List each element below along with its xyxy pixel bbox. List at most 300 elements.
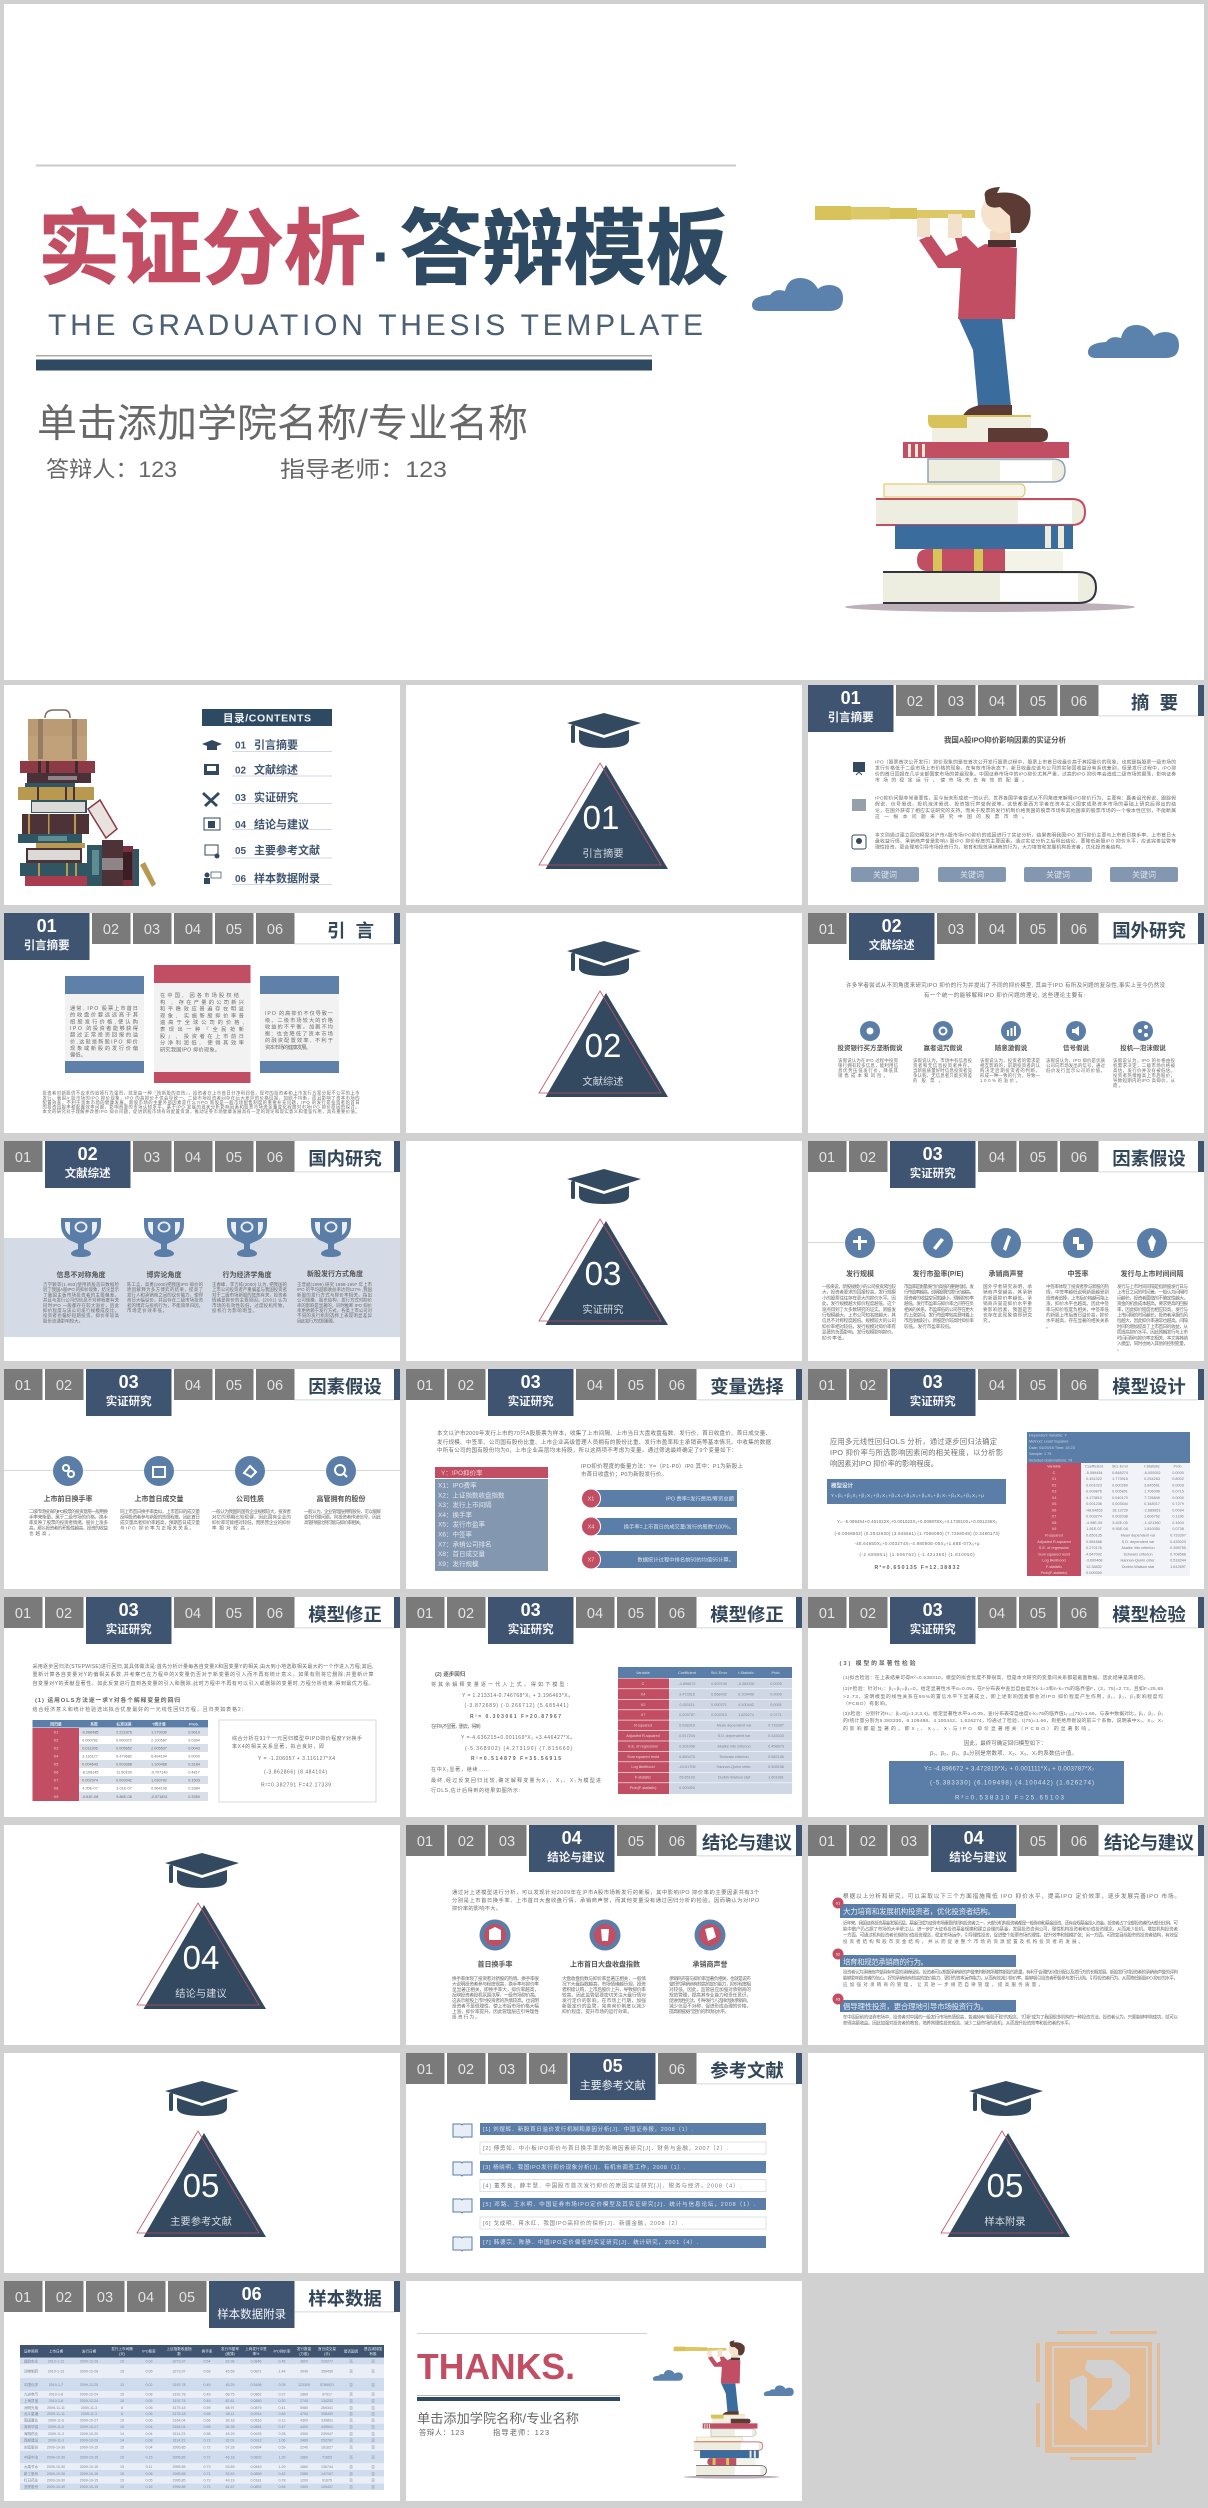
- section tabs: 06: [1071, 1378, 1087, 1394]
- sample data table: 1860: [300, 2465, 308, 2469]
- research angles: 王春峰、李吉栋(2000) 认为, 把我国的: [212, 1281, 288, 1288]
- regression table: Sum squared resid: [1038, 1552, 1070, 1556]
- regression table: 0.1503: [188, 1778, 200, 1782]
- slide heading: 模型修正: [308, 1604, 382, 1625]
- sample data table: 10: [120, 2425, 124, 2429]
- section tabs: 06: [1071, 1150, 1087, 1166]
- key factors: 者积极认购，上市后股价上升，导致抑价率: [562, 1986, 646, 1993]
- section tabs: 实证研究: [910, 1622, 956, 1636]
- slide heading: 模型检验: [1112, 1604, 1186, 1625]
- rule: [417, 2395, 620, 2401]
- sample data table: 32.01: [226, 2438, 234, 2442]
- card: right: 衡; 也会降低了资本市场: [265, 1029, 333, 1037]
- section tabs: 06: [1071, 1834, 1087, 1850]
- regression table: 1.773915: [1112, 1477, 1128, 1481]
- method paragraph: 重新计算各自变量对Y的偏相关系数,并考察已在方程中的X变量仍否对于新变量的引入而不再有统计意义。如果有则将它删除;并重新计算: [32, 1671, 374, 1678]
- factor texts: 投资者追捧，上市后价格越可能上: [1046, 1294, 1109, 1301]
- regression table: -0.066485: [81, 1730, 99, 1734]
- factor texts: 相关的关系，市盈率低的公司存在更大: [904, 1306, 974, 1313]
- factor texts: 观点得到了大多数研究的证实。新股发: [822, 1306, 896, 1313]
- factor texts: 资金的机会成本越高，要求更高的回报: [1117, 1300, 1188, 1307]
- sample data table: 东睦股份: [24, 2444, 39, 2449]
- stepwise regression steps: [431, 1670, 601, 1794]
- recommendation text: 获得高额收益。因此加强对投资者的教育，培养其理性投资观念，减少二级市场的投机，从而提升投资效率和投资者的水平。: [843, 2020, 1073, 2026]
- title: 答辩模板: [400, 204, 728, 295]
- factor texts: 较低。发行市盈率较低。: [904, 1323, 954, 1330]
- card: left: 招股发行价格,使认购: [70, 1017, 138, 1025]
- factor texts: 入模型，同时也纳入其他的控制变量，: [1117, 1340, 1188, 1347]
- regression table: 0.003274: [1086, 1515, 1102, 1519]
- regression table: 0.0394: [188, 1738, 200, 1742]
- result box: Y = -1.206057 + 3.116127*X4: [258, 1756, 335, 1762]
- subheading note: 结合经济意义和统计检验选出拟合优度最好的一元线性回归方程，且归类如表格2：: [32, 1706, 246, 1713]
- intro: 通过对上述模型进行分析，可以发现针对2009年在沪市A股市场新发行的新股，其中影响IPO 抑价率的主要因素共有3个: [452, 1888, 760, 1896]
- section tabs: 02: [860, 1834, 876, 1850]
- sample data table: (万股): [299, 2352, 309, 2356]
- section tabs: 01: [819, 922, 835, 938]
- sample data table: 率%: [253, 2351, 260, 2356]
- research angles: 了我国主板市场投资者的主要偏差。: [43, 1291, 119, 1298]
- sample data table: 15: [120, 2478, 124, 2482]
- sample data table: 2009-12-25: [80, 2383, 98, 2387]
- regression table: 11.50199: [116, 1770, 132, 1774]
- regression table: X9: [54, 1795, 58, 1799]
- regression table: Sum squared resid: [627, 1755, 659, 1759]
- sample data table: 0.0823: [250, 2456, 262, 2460]
- sample data table: 中国化学: [24, 2382, 39, 2387]
- regression table: Adjusted R-squared: [1037, 1540, 1071, 1544]
- sample data table: 0.0880: [250, 2399, 262, 2403]
- section tabs: 实证研究: [106, 1622, 152, 1636]
- regression table: X9: [1052, 1527, 1056, 1531]
- section tabs: 01: [417, 2062, 433, 2078]
- research angles: 情绪是抑价的主要原因。(2001) 认为: [212, 1297, 287, 1304]
- regression table: 0.964106: [151, 1786, 167, 1790]
- regression table: 3.845561: [1144, 1483, 1160, 1487]
- factor texts: [822, 1269, 1188, 1352]
- regression table: Prob.: [189, 1722, 199, 1726]
- recommendation bars: [832, 1898, 1016, 2012]
- factor texts: 销商声誉越高，其承销: [983, 1289, 1032, 1296]
- sample data table: 3273.97: [172, 2360, 186, 2364]
- sample data table: 15: [120, 2360, 124, 2364]
- section tabs: 06: [1071, 1606, 1087, 1622]
- sample data table: 0.02: [146, 2383, 152, 2387]
- measure note: 市首日收盘价；P0为新股发行价。: [581, 1470, 667, 1478]
- sample data table: 发行市盈率: [221, 2346, 239, 2351]
- sample data table: 2009-10-30: [47, 2472, 65, 2476]
- sample data table: 0.66: [204, 2418, 210, 2422]
- section tabs: 04: [185, 922, 201, 938]
- contents icons: [202, 740, 222, 884]
- sample data table: (摊薄): [225, 2351, 235, 2356]
- panel: model revision 2: [406, 1597, 802, 1817]
- method description: 应用多元线性回归OLS 分析，通过逐步回归法确定: [830, 1437, 997, 1446]
- regression table: 0.001023: [1086, 1483, 1102, 1487]
- key factors: 换手率体现了投资者对新股的热情。换手率很: [452, 1975, 539, 1982]
- sample data table: 0.54: [204, 2360, 210, 2364]
- section tabs: 06: [267, 1378, 283, 1394]
- panel: references: [406, 2053, 802, 2273]
- sample data table: 147197: [321, 2472, 333, 2476]
- section tabs: 04: [989, 1150, 1005, 1166]
- sample data table: 2009-11-3: [48, 2432, 64, 2436]
- sample data table: 否: [349, 2412, 353, 2416]
- sample data table: 8: [121, 2412, 123, 2416]
- regression table: 1.810050: [1144, 1527, 1160, 1531]
- section tabs: 05: [1030, 922, 1046, 938]
- section tabs: 06: [242, 2284, 262, 2304]
- regression table: -8.108145: [81, 1770, 99, 1774]
- sample data table: 2010-1-8: [49, 2399, 63, 2403]
- sample data table: 4300: [300, 2418, 308, 2422]
- sample data table: 0.0912: [250, 2438, 262, 2442]
- key factors: 减少信息不对称，促进形成合理的价格，: [669, 2002, 751, 2010]
- regression table: Hannan-Quinn criter.: [716, 1765, 752, 1769]
- sample data table: 15: [120, 2465, 124, 2469]
- section tabs: 04: [989, 694, 1005, 710]
- sample data table: 1.25: [278, 2456, 286, 2460]
- method paragraph: 自变量对Y的贡献显著性。如此反复进行直到各变量的引入和删除,此时方程中不再有可以引入或删除的变量时,方程分析结束,得到最优方程。: [32, 1680, 374, 1687]
- sample data table: 339801: [321, 2418, 333, 2422]
- slide heading: 模型设计: [1112, 1376, 1186, 1397]
- final model box: R²=0.538310 F=25.65103: [955, 1794, 1065, 1802]
- slide heading: 因素假设: [308, 1376, 382, 1397]
- regression table: 18.13729: [1112, 1508, 1128, 1512]
- regression table: X3: [1052, 1490, 1056, 1494]
- regression table: 1.601981: [768, 1776, 784, 1780]
- section tabs: 04: [185, 1606, 201, 1622]
- regression table: X8: [1052, 1521, 1056, 1525]
- regression table: 0.0001: [770, 1703, 782, 1707]
- result box: [219, 1720, 376, 1802]
- factor texts: 小的股票往往存在更大的抑价水平。因: [822, 1294, 896, 1301]
- section tabs: 02: [78, 1144, 98, 1164]
- stepwise regression steps: R²= 0.303061 F=20.87967: [470, 1714, 561, 1720]
- regression table: 1.612697: [1170, 1565, 1186, 1569]
- panel: title slide: [4, 4, 1204, 680]
- regression equation: R²=0.650135 F=12.38832: [874, 1565, 960, 1571]
- section tabs: 01: [15, 1606, 31, 1622]
- recommendation text: 在中国目前的证券市场中，投资者对中国的一级发行市场热情很高，普遍持有"新股不败"的观念，"打新"成为了我国很多机构的一种投资方法。投资者认为，只要能够申购成功，就可以: [843, 2014, 1178, 2020]
- key factors: 誉好的承销商有较高的定价能力，抑价程度相: [669, 1980, 751, 1988]
- regression table: 0.003368: [116, 1762, 132, 1766]
- sample data table: 0.06: [146, 2418, 152, 2422]
- factor texts: 的上涨空间。发行市盈率较高意味着上: [904, 1312, 974, 1318]
- factor texts: 间越长，投资者面临的不确定性越大，: [1117, 1294, 1188, 1301]
- regression table: X7: [1052, 1515, 1056, 1519]
- sample data table: 3114.23: [173, 2432, 185, 2436]
- regression table: 0.733397: [1170, 1534, 1186, 1538]
- key factors: 规范管理，提高其专业能力和责任意识，: [669, 1992, 751, 1998]
- regression table: Std. Error: [711, 1671, 728, 1675]
- factor texts: 。: [1117, 1347, 1122, 1352]
- regression table: 2.221876: [116, 1730, 132, 1734]
- regression table: 0.000269: [1112, 1483, 1128, 1487]
- regression table: Adjusted R-squared: [626, 1734, 660, 1738]
- keyword buttons: 关键词: [1046, 870, 1070, 880]
- factor texts: 投资者的收益空间就越小，预期抑价率: [904, 1294, 974, 1301]
- sample data table: 2010-1-8: [49, 2393, 63, 2397]
- sample data table: 61.67: [226, 2485, 234, 2489]
- sample data table: 2009-12-28: [80, 2370, 98, 2374]
- sample data table: 15: [120, 2472, 124, 2476]
- contents list: 文献综述: [254, 762, 298, 776]
- recommendation text: 能够影响投资者的信心。好的承销商有较高的定价能力、更好的资本运作能力，从而有效减少抑价率，能够吸引投资者积极参与发行认购。引导投资者行为，从而降低新股IPO 抑价的水平，: [843, 1974, 1178, 1982]
- sample data table: 2009-10-15: [80, 2456, 98, 2460]
- regression table: X4: [1052, 1496, 1056, 1500]
- regression table: 0.8002: [1172, 1477, 1184, 1481]
- sample data table: 2995.85: [172, 2456, 186, 2460]
- sample data table: 0.04: [146, 2432, 152, 2436]
- heading: contents: 目录/CONTENTS: [223, 711, 311, 724]
- sample data table: 0.47: [278, 2425, 286, 2429]
- regression table: 2.005537: [151, 1746, 167, 1750]
- section tabs: 06: [267, 1150, 283, 1166]
- stepwise regression steps: Y =-4.636215+0.001169*X₂ +3.446427*X₄: [461, 1735, 572, 1741]
- research angles: 投机行为影响明显。: [212, 1307, 257, 1314]
- sample data table: 38.18: [226, 2418, 234, 2422]
- sample data table: 0.08: [146, 2393, 152, 2397]
- regression table: 0.517204: [679, 1734, 695, 1738]
- regression table: 1.706006: [1144, 1490, 1160, 1494]
- card: middle: 股』, 投资者在上市前日: [160, 1032, 244, 1040]
- sample data table: 14: [120, 2432, 124, 2436]
- section tabs: 03: [521, 1600, 541, 1620]
- recommendation bars: 倡导理性投资，更合理地引导市场投资行为。: [843, 2001, 988, 2011]
- sample data table: 0.06: [146, 2406, 152, 2410]
- recommendation bars: 03: [836, 1996, 841, 2002]
- regression table: 0.003787: [679, 1713, 695, 1717]
- sample data table: 2009-11-11: [47, 2412, 65, 2416]
- section tabs: [4, 1597, 400, 1644]
- sample data table: 1.29: [278, 2465, 286, 2469]
- section tabs: 06: [669, 1378, 685, 1394]
- sample data table: 大禹节水: [24, 2464, 39, 2469]
- regression table: X3: [54, 1746, 58, 1750]
- panel: factor hypotheses 1: [808, 1141, 1204, 1361]
- reference bars: [2] 傅勇如．中小板IPO抑价与首日换手率的影响因素研究[J]．财务与金融，2007（2）.: [483, 2144, 728, 2152]
- sample data table: 否: [371, 2383, 375, 2387]
- regression table: R-squared: [634, 1724, 652, 1728]
- regression equation: (-6.0068502) (0.2542630) (3.845561) (1.7066090) (7.7268049) (0.3480173): [834, 1531, 1000, 1536]
- sample data table: 0.71: [204, 2472, 210, 2476]
- regression table: 0.433023: [768, 1734, 784, 1738]
- definition bars: X4: [588, 1524, 594, 1530]
- regression table: 0.0000: [188, 1754, 200, 1758]
- panel: section 02: [406, 913, 802, 1133]
- sample data table: 45.29: [226, 2432, 234, 2436]
- regression table: S.E. of regression: [1039, 1546, 1069, 1550]
- result box: 综合分析在91个一元回归模型中IPO抑价程度Y对换手: [232, 1735, 362, 1742]
- factor texts: 对它的预期比较稳健，因此国有企业的: [212, 1514, 291, 1520]
- section tabs: 05: [1030, 1834, 1046, 1850]
- section tabs: 04: [138, 2290, 154, 2306]
- theory columns: 导致短期内的IPO 高抑价，从: [1113, 1077, 1176, 1084]
- sample data table: 亚厦股份: [24, 2484, 39, 2489]
- sample data table: 0.04: [146, 2425, 152, 2429]
- sample data table: 53.89: [226, 2465, 234, 2469]
- definition bars: 换手率=上市首日的成交量/发行的股数*100%。: [624, 1522, 734, 1530]
- theory columns: 该假说认为在IPO 过程中投资: [838, 1057, 899, 1064]
- regression table: 1.81E-07: [1086, 1527, 1102, 1531]
- reference bars: [6] 戈成明、蒋水红．我国IPO高抑价的探析[J]．新疆金融，2008（2）.: [483, 2219, 683, 2227]
- theory columns: 形成一种一致的行为，导致一: [980, 1072, 1041, 1079]
- factor texts: 也存在此现象值得研究: [983, 1312, 1032, 1318]
- regression table: Date: 04/29/18 Time: 15:23: [1029, 1446, 1075, 1450]
- section label: 实证研究: [582, 1303, 624, 1316]
- regression table: X7: [54, 1778, 58, 1782]
- sample data table: 否: [349, 2472, 353, 2476]
- section tabs: 05: [628, 1606, 644, 1622]
- section tabs: 03: [97, 2290, 113, 2306]
- sample data table: 3460: [300, 2438, 308, 2442]
- sample data table: 0.05: [146, 2399, 152, 2403]
- regression table: 6.109498: [738, 1692, 754, 1696]
- regression table: 3.116127: [82, 1754, 98, 1758]
- illustration: student with telescope on books: [653, 2340, 794, 2479]
- test text: (2)F检验：针对H₀：β₁=β₂=β₃=0，给定显著性水平α=0.05，在F分布表中查出自由度为k-1=3和n-k=75的临界值F，(3，75)=2.73，且如F=25.65: [843, 1685, 1163, 1692]
- sample data table: 269341: [321, 2406, 333, 2410]
- sample data table: 否: [371, 2425, 375, 2429]
- factor texts: 信息不对称程度越低。规模较大的公司: [822, 1317, 896, 1324]
- regression table: -1.421360: [1143, 1521, 1161, 1525]
- sample data table: 否: [349, 2383, 353, 2387]
- section number: 05: [987, 2167, 1023, 2204]
- variable list: X9：发行规模: [438, 1559, 479, 1568]
- panel: factor hypotheses 2: [4, 1369, 400, 1589]
- defender: 答辩人：123: [46, 457, 177, 482]
- regression table: 0.002038: [1112, 1515, 1128, 1519]
- sample data table: 西部建设: [24, 2438, 39, 2442]
- sample data table: 2009-10-27: [80, 2425, 98, 2429]
- sample data table: 0.16: [146, 2485, 152, 2489]
- section tabs: [808, 1597, 1204, 1644]
- regression table: Prob(F-statistic): [630, 1786, 657, 1790]
- sample data table: 2995.85: [172, 2478, 186, 2482]
- model formula box: Y=β₀+β₁X₁+β₂X₂+β₃X₃+β₄X₄+β₅X₅+β₆X₆+β₇X₇+β₈X₈+β₉X₉+μ: [831, 1493, 984, 1499]
- reference bars: [1] 刘煜辉．新股首日溢价发行机制和原因分析[J]．中国证券报，2008（1）.: [483, 2125, 693, 2133]
- section tabs: 03: [948, 694, 964, 710]
- sample data table: 68.75: [226, 2393, 234, 2397]
- regression table: 0.301096: [679, 1744, 695, 1748]
- sample data table: 3175.18: [172, 2412, 186, 2416]
- factor texts: 时间的增加提高了上市首日的收益，从: [1117, 1323, 1188, 1330]
- key factors: 大说明投资者参与程度很高，换手率与抑价率: [452, 1980, 539, 1988]
- sample data table: 否: [371, 2485, 375, 2489]
- book icons: [453, 2124, 472, 2251]
- section tabs: 04: [989, 1606, 1005, 1622]
- regression table: [32, 1720, 208, 1801]
- regression table: 标准误差: [116, 1722, 132, 1726]
- variable list: X7：承销公司排名: [438, 1540, 491, 1548]
- regression table: 0.0003: [1172, 1483, 1184, 1487]
- sample data table: 上海凯宝: [24, 2398, 39, 2403]
- factor texts: 发行与上市时间间隔: [1120, 1269, 1184, 1278]
- sample data table: 0.05: [278, 2383, 286, 2387]
- highlight band: [4, 1238, 400, 1337]
- measure note: IPO抑价程度的衡量方法：Y=（P1-P0）/P0 其中：P1为新股上: [581, 1462, 743, 1470]
- factor texts: 高管持股比例可能与抑价率相关。: [304, 1519, 364, 1526]
- regression table: 0.011206: [82, 1746, 98, 1750]
- summary paragraph: 本文的研究对于理解并改善IPO 抑价问题，促进新股市场有效配置资源，推动证券市场健康发展具有一定的理论和现实意义和借鉴作用，具有重要价值。: [42, 1108, 360, 1115]
- abstract paragraphs: 理性投资，更合理地引导市场投资行为，培育和规范承销商的行为，大力培育和发展机构投资者，优化投资者结构。: [875, 844, 1125, 850]
- key factors: 投资行为。: [452, 2014, 480, 2020]
- sample data table: 否: [371, 2472, 375, 2476]
- research angles: 验了我国A股IPO 的抑价现象，结论显示: [43, 1286, 120, 1293]
- slide heading: 参考文献: [710, 2060, 784, 2081]
- sample data table: 3040: [300, 2370, 308, 2374]
- key factors: 促进优胜劣汰，引导发行人选择优质承销商，: [669, 1997, 751, 2004]
- summary paragraph: 发行。我国A 股市场的IPO 抑价现象，IPO 的高抑价不仅会导致一、二级市场投资者间存在巨大差异的价格回报，加剧不均衡，而且影响了资本市场的: [42, 1094, 360, 1102]
- regression table: -0.971831: [150, 1795, 168, 1799]
- sample data table: 深圳华强: [24, 2424, 39, 2429]
- regression table: 0.004643: [82, 1762, 98, 1766]
- paper title: 我国A股IPO抑价影响因素的实证分析: [944, 734, 1066, 744]
- sample data table: 0.0849: [250, 2465, 262, 2469]
- section tabs: 04: [185, 1150, 201, 1166]
- title rule: [36, 355, 652, 370]
- regression table: -5.089454: [1085, 1471, 1103, 1475]
- sample data table: 45.59: [226, 2370, 234, 2374]
- card: left: 通常, IPO 股票上市首日: [70, 1004, 138, 1012]
- theory columns: 该假说认为，投资者的需求是: [980, 1057, 1041, 1064]
- key factors: 对较低。因此，监管层应加强对承销商的: [669, 1986, 751, 1993]
- regression table: 0.1604: [1172, 1521, 1184, 1525]
- sample data table: 349501: [321, 2425, 333, 2429]
- sample data table: 鼎韵农业: [24, 2358, 39, 2364]
- sample data table: 0.59: [204, 2406, 210, 2410]
- sample data table: 2009-10-27: [80, 2418, 98, 2422]
- theory columns: 争认购，无信息者只能买到差: [913, 1072, 973, 1079]
- card: middle: 遍高于全球公司的价格,: [160, 1018, 244, 1026]
- contents list: 02: [235, 766, 247, 776]
- panel: section 01: [406, 685, 802, 905]
- section tabs: 05: [603, 2056, 623, 2076]
- key factors: 承销商声誉与抑价率显著负相关，也就是说声: [669, 1975, 751, 1982]
- variable list: [435, 1467, 548, 1571]
- regression table: 0.001236: [1086, 1502, 1102, 1506]
- recommendation text: 近年来，我国证券投资基金发展迅猛，基金已成为证券市场重要的机构投资者之一，大部分机构投资者都是一般券商和基金投资，还有合规基金投入资金。投资者占了全部投资者的大部分比例，可: [843, 1920, 1179, 1926]
- sample data table: 2009-10-20: [80, 2438, 98, 2442]
- sample data table: 2740: [300, 2399, 308, 2403]
- sample data table: 2009-12-24: [80, 2393, 98, 2397]
- summary paragraph: [42, 1090, 360, 1115]
- section tabs: 05: [628, 1378, 644, 1394]
- sample data table: 0.0862: [250, 2393, 262, 2397]
- regression table: 0.508158: [768, 1765, 784, 1769]
- sample data table: 52.63: [226, 2472, 234, 2476]
- sample data table: 0.78: [278, 2478, 286, 2482]
- sample data table: 15: [120, 2393, 124, 2397]
- card: middle: 表现出一种『全民抢新: [160, 1025, 244, 1033]
- method paragraph: 采用逐步回归法(STEPWISE)进行回归,其具体做法是:首先分析计量每各自变量X和因变量Y的相关,由大到小地选取相关最大的一个作进入方程;其后,: [32, 1663, 374, 1670]
- section tabs: 02: [907, 694, 923, 710]
- section tabs: [406, 1369, 802, 1416]
- regression table: 1.170030: [151, 1730, 167, 1734]
- sample data table: 0.12: [278, 2418, 286, 2422]
- sample data table: 上网发行中签: [245, 2346, 267, 2351]
- college name: 单击添加学院名称/专业名称: [417, 2411, 579, 2426]
- card: right: 收益的不平衡。加剧不均: [265, 1023, 333, 1031]
- key factors: 上涨，抑价率提升。因此管理层应引导理性: [452, 2008, 539, 2015]
- section tabs: 03: [119, 1600, 139, 1620]
- sample data table: 15: [120, 2485, 124, 2489]
- sample data table: 2010-1-7: [49, 2383, 63, 2387]
- theory columns: 销售成本和风险。: [838, 1072, 888, 1079]
- regression table: 0.7279: [1172, 1502, 1184, 1506]
- panel: conclusions 2: [808, 1825, 1204, 2045]
